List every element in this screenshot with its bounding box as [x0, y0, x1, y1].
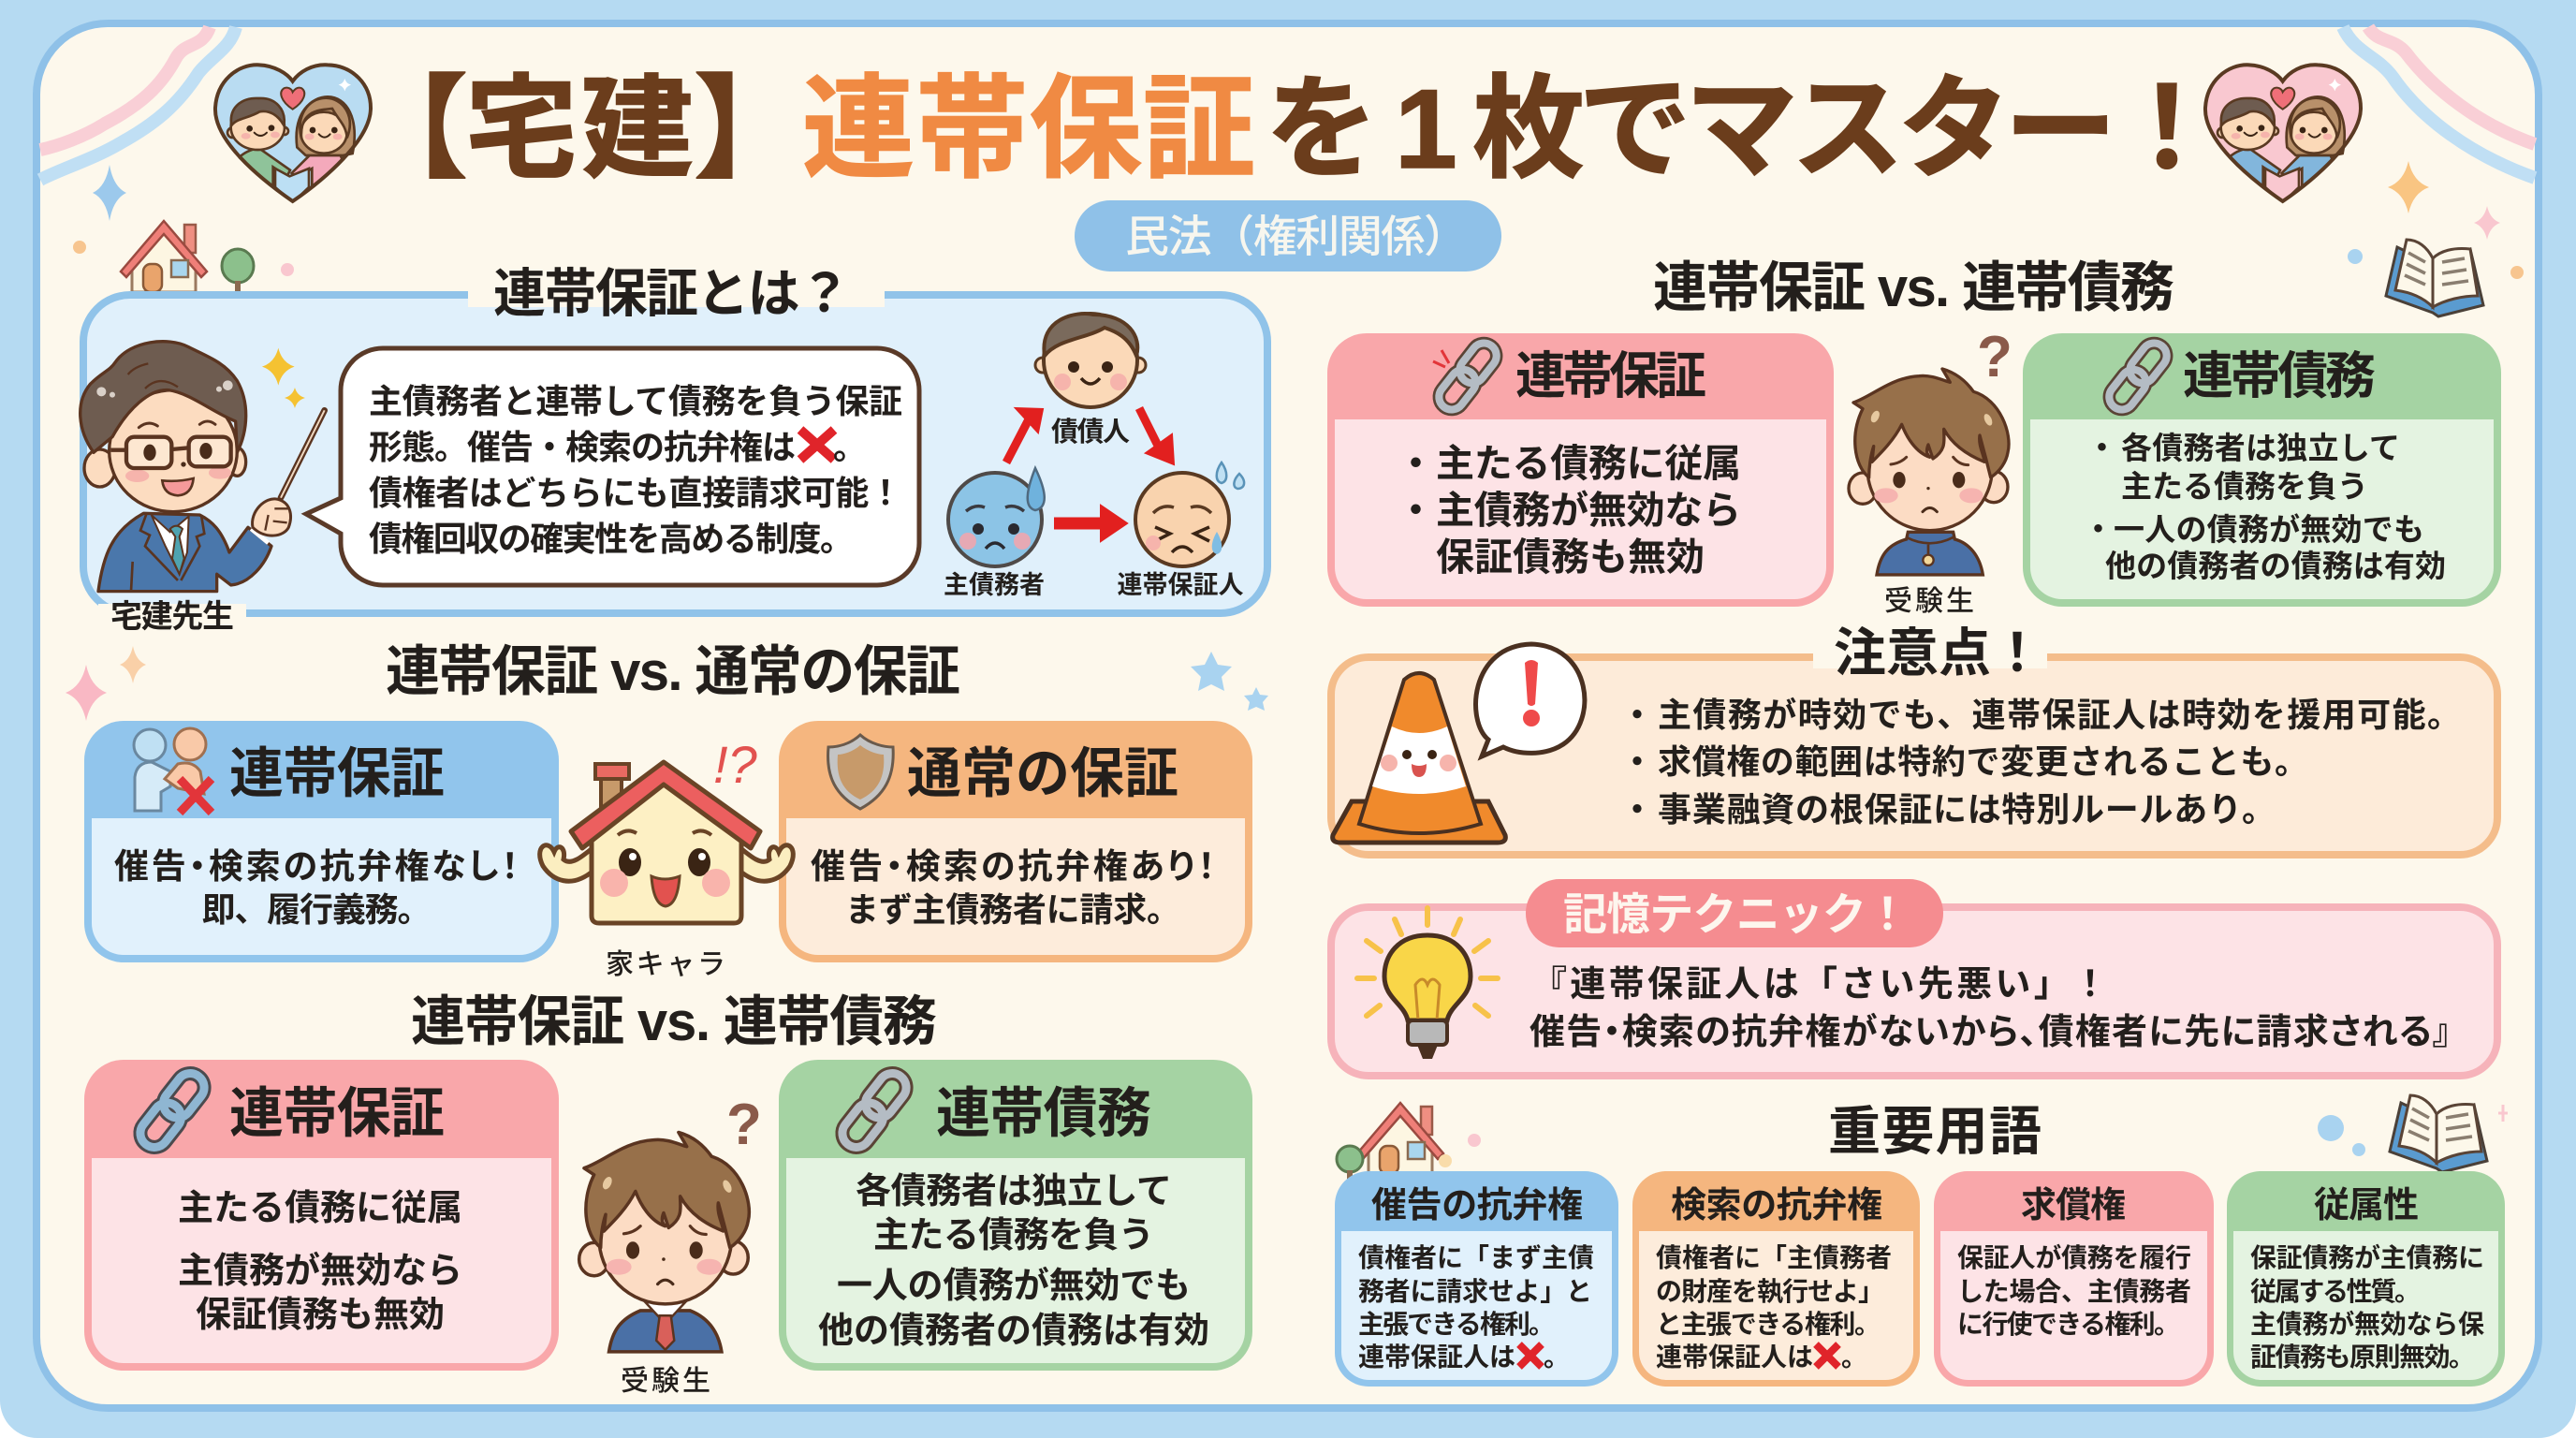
- pill heading: [1526, 879, 1943, 947]
- title: 】: [694, 66, 806, 192]
- card: rentai hosho right: ・: [1397, 489, 1435, 532]
- heading: renteihosho vs normal: 連帯保証 vs. 通常の保証: [386, 641, 960, 702]
- card: rentai hosho blue: [84, 721, 559, 962]
- icon: chain: [1434, 338, 1501, 415]
- title: を: [1266, 66, 1378, 192]
- icon: chain: [2104, 338, 2172, 415]
- icon: small house bottom right: [1337, 1103, 1481, 1180]
- face: creditor: [1035, 314, 1146, 407]
- heading: hosho vs saimu left: 連帯保証 vs. 連帯債務: [411, 991, 937, 1052]
- icon: speech bubble exclamation: [1476, 644, 1585, 756]
- icon: teacher: [80, 342, 325, 592]
- icon: shield: [828, 735, 893, 809]
- pill heading: 記憶テクニック！: [1563, 889, 1910, 939]
- heading: hosho vs saimu right: 連帯保証 vs. 連帯債務: [1653, 257, 2174, 318]
- icon: red cross: [1519, 1344, 1542, 1367]
- heading: 連帯保証とは？: [493, 264, 851, 323]
- card: rentai saimu right: 一人の債務が無効でも: [2114, 512, 2424, 547]
- arrows: [1006, 408, 1174, 541]
- card: rentai saimu green: [779, 1060, 1252, 1371]
- card: rentai hosho pink: 主たる債務に従属: [178, 1189, 462, 1228]
- category pill: 民法（権利関係）: [1125, 212, 1468, 261]
- card: rentai hosho pink: 連帯保証: [229, 1083, 445, 1144]
- card: kensaku: 。: [1841, 1343, 1867, 1372]
- card: juzokusei: 従属性: [2314, 1186, 2419, 1225]
- icon: student suit: ?: [726, 1093, 762, 1157]
- panel: memory technique: 催告・検索の抗弁権がないから、債権者に先に請求される』: [1530, 1013, 2451, 1052]
- icon: open book top right: [2386, 240, 2483, 316]
- ribbon decorations: [40, 27, 2535, 180]
- mnemonic text: 『連帯保証人は「さい先悪い」！: [1531, 965, 2108, 1005]
- speech bubble: 形態。催告・検索の抗弁権は: [369, 428, 796, 466]
- speech bubble: 。: [833, 428, 867, 466]
- panel: what is renteihosho: [83, 264, 1267, 626]
- card: saikoku: 。: [1544, 1343, 1570, 1372]
- card: rentai hosho blue: 連帯保証: [229, 743, 445, 804]
- icon: red cross: [800, 430, 834, 460]
- card: rentai saimu right: ・: [2083, 512, 2114, 547]
- card: rentai saimu right: 連帯債務: [2183, 348, 2376, 404]
- card: saikoku: 連帯保証人は: [1358, 1343, 1515, 1372]
- card: rentai hosho pink: 保証債務も無効: [196, 1296, 445, 1335]
- icon: chain: [135, 1068, 210, 1152]
- card: kyushoken: [1934, 1171, 2214, 1387]
- card: kensaku: [1632, 1171, 1920, 1387]
- list: 求償権の範囲は特約で変更されることも。: [1658, 742, 2308, 781]
- card: kensaku: の財産を執行せよ」: [1656, 1277, 1884, 1306]
- card: normal guarantee orange: まず主債務者に請求。: [845, 890, 1180, 929]
- card: saikoku: 務者に請求せよ」と: [1358, 1277, 1592, 1306]
- labels: 債債人: [1051, 417, 1130, 448]
- card: juzokusei: 従属する性質。: [2250, 1277, 2421, 1306]
- icon: traffic cone: [1333, 673, 1505, 843]
- icon: house character: [540, 735, 793, 923]
- card: rentai saimu green: 連帯債務: [936, 1083, 1151, 1144]
- card: rentai hosho right: ・: [1397, 442, 1435, 485]
- diagram: three party relation: 連帯保証人: [1118, 571, 1243, 599]
- speech bubble: [306, 348, 919, 585]
- label: student left: 受験生: [621, 1366, 710, 1397]
- card: saikoku: 債権者に「まず主債: [1358, 1243, 1594, 1272]
- card: kyushoken: に行使できる権利。: [1957, 1310, 2180, 1339]
- card: rentai hosho pink: [84, 1060, 559, 1371]
- card: kensaku: 検索の抗弁権: [1671, 1186, 1882, 1225]
- card: kyushoken: 求償権: [2021, 1186, 2126, 1225]
- title: 枚でマスター！: [1472, 66, 2223, 192]
- card: kyushoken: した場合、主債務者: [1957, 1277, 2191, 1306]
- speech bubble: 債権回収の確実性を高める制度。: [369, 520, 854, 558]
- icon: heart couple right: [2205, 65, 2361, 203]
- panel: caution: [1331, 624, 2497, 855]
- label: student right: 受験生: [1884, 586, 1974, 617]
- speech bubble: 主債務者と連帯して債務を負う保証: [369, 382, 902, 420]
- icon: heart couple left: [215, 65, 371, 203]
- card: saikoku: 催告の抗弁権: [1371, 1186, 1583, 1225]
- card: juzokusei: 主債務が無効なら保: [2250, 1309, 2484, 1339]
- icon: book bottom right: [2318, 1095, 2508, 1172]
- heading: key terms: 重要用語: [1828, 1102, 2042, 1161]
- card: rentai saimu green: 主たる債務を負う: [873, 1216, 1154, 1255]
- icon: red cross: [1816, 1344, 1838, 1367]
- card: rentai hosho blue: 即、履行義務。: [202, 890, 431, 929]
- card: kyushoken: 保証人が債務を履行: [1957, 1242, 2191, 1272]
- label: teacher: 宅建先生: [110, 599, 234, 635]
- card: rentai hosho right: 主たる債務に従属: [1436, 442, 1741, 485]
- panel: memory technique: [1331, 879, 2497, 1076]
- card: rentai hosho right: 主債務が無効なら: [1436, 489, 1741, 532]
- card: rentai hosho blue: 催告・検索の抗弁権なし！: [114, 847, 519, 886]
- face: debtor: [948, 468, 1045, 566]
- card: rentai saimu right: 主たる債務を負う: [2121, 469, 2368, 504]
- card: rentai hosho right: 連帯保証: [1515, 348, 1706, 404]
- icon: student gakuran: [1849, 325, 2012, 575]
- card: kensaku: 債権者に「主債務者: [1656, 1243, 1892, 1272]
- icon: chain: [837, 1068, 912, 1152]
- card: kensaku: と主張できる権利。: [1656, 1310, 1881, 1339]
- icon: house character: !?: [713, 735, 757, 794]
- list: ・: [1620, 696, 1654, 734]
- card: rentai saimu right: 他の債務者の債務は有効: [2105, 549, 2446, 583]
- card: kensaku: 連帯保証人は: [1656, 1343, 1813, 1372]
- icon: small house top left: [121, 221, 254, 294]
- diagram: three party relation: 主債務者: [944, 571, 1045, 599]
- title: 1: [1395, 66, 1457, 192]
- icon: handshake with cross: [134, 728, 212, 813]
- list: ・: [1620, 742, 1654, 781]
- list: [1620, 696, 2461, 829]
- list: ・: [1620, 790, 1654, 829]
- list: 事業融資の根保証には特別ルールあり。: [1658, 790, 2276, 829]
- title: [356, 66, 2223, 192]
- card: juzokusei: 保証債務が主債務に: [2250, 1242, 2484, 1272]
- card: normal guarantee orange: 催告・検索の抗弁権あり！: [811, 847, 1215, 886]
- card: saikoku: 主張できる権利。: [1358, 1310, 1555, 1339]
- card: saikoku: [1335, 1171, 1618, 1387]
- icon: light bulb: [1357, 908, 1498, 1059]
- diagram: three party relation: [944, 314, 1244, 599]
- card: rentai hosho right: 保証債務も無効: [1436, 536, 1705, 579]
- list: 主債務が時効でも、連帯保証人は時効を援用可能。: [1658, 696, 2461, 734]
- card: juzokusei: 証債務も原則無効。: [2250, 1343, 2475, 1372]
- card: rentai saimu green: 各債務者は独立して: [856, 1172, 1172, 1211]
- card: rentai saimu green: 一人の債務が無効でも: [837, 1267, 1191, 1306]
- card: rentai saimu right: [2023, 333, 2501, 607]
- card: normal guarantee orange: [779, 721, 1252, 962]
- card: rentai saimu right: 各債務者は独立して: [2121, 431, 2400, 465]
- card: rentai saimu right: ・: [2086, 431, 2117, 465]
- face: guarantor: [1135, 462, 1244, 566]
- category pill: [1075, 200, 1501, 271]
- title: 【: [356, 66, 468, 192]
- icon: student gakuran: ?: [1977, 325, 2012, 389]
- card: normal guarantee orange: 通常の保証: [907, 743, 1178, 804]
- speech bubble: 債権者はどちらにも直接請求可能！: [369, 474, 902, 512]
- card: rentai hosho right: [1327, 333, 1834, 607]
- card: juzokusei: [2227, 1171, 2505, 1387]
- card: rentai saimu green: 他の債務者の債務は有効: [818, 1312, 1209, 1351]
- decorations top: [66, 161, 2524, 721]
- label: house character: 家キャラ: [606, 949, 725, 980]
- card: rentai hosho pink: 主債務が無効なら: [178, 1252, 462, 1291]
- icon: student suit: [579, 1093, 762, 1352]
- title: 宅建: [465, 66, 694, 192]
- title: 連帯保証: [802, 66, 1255, 192]
- heading: 注意点！: [1834, 624, 2043, 682]
